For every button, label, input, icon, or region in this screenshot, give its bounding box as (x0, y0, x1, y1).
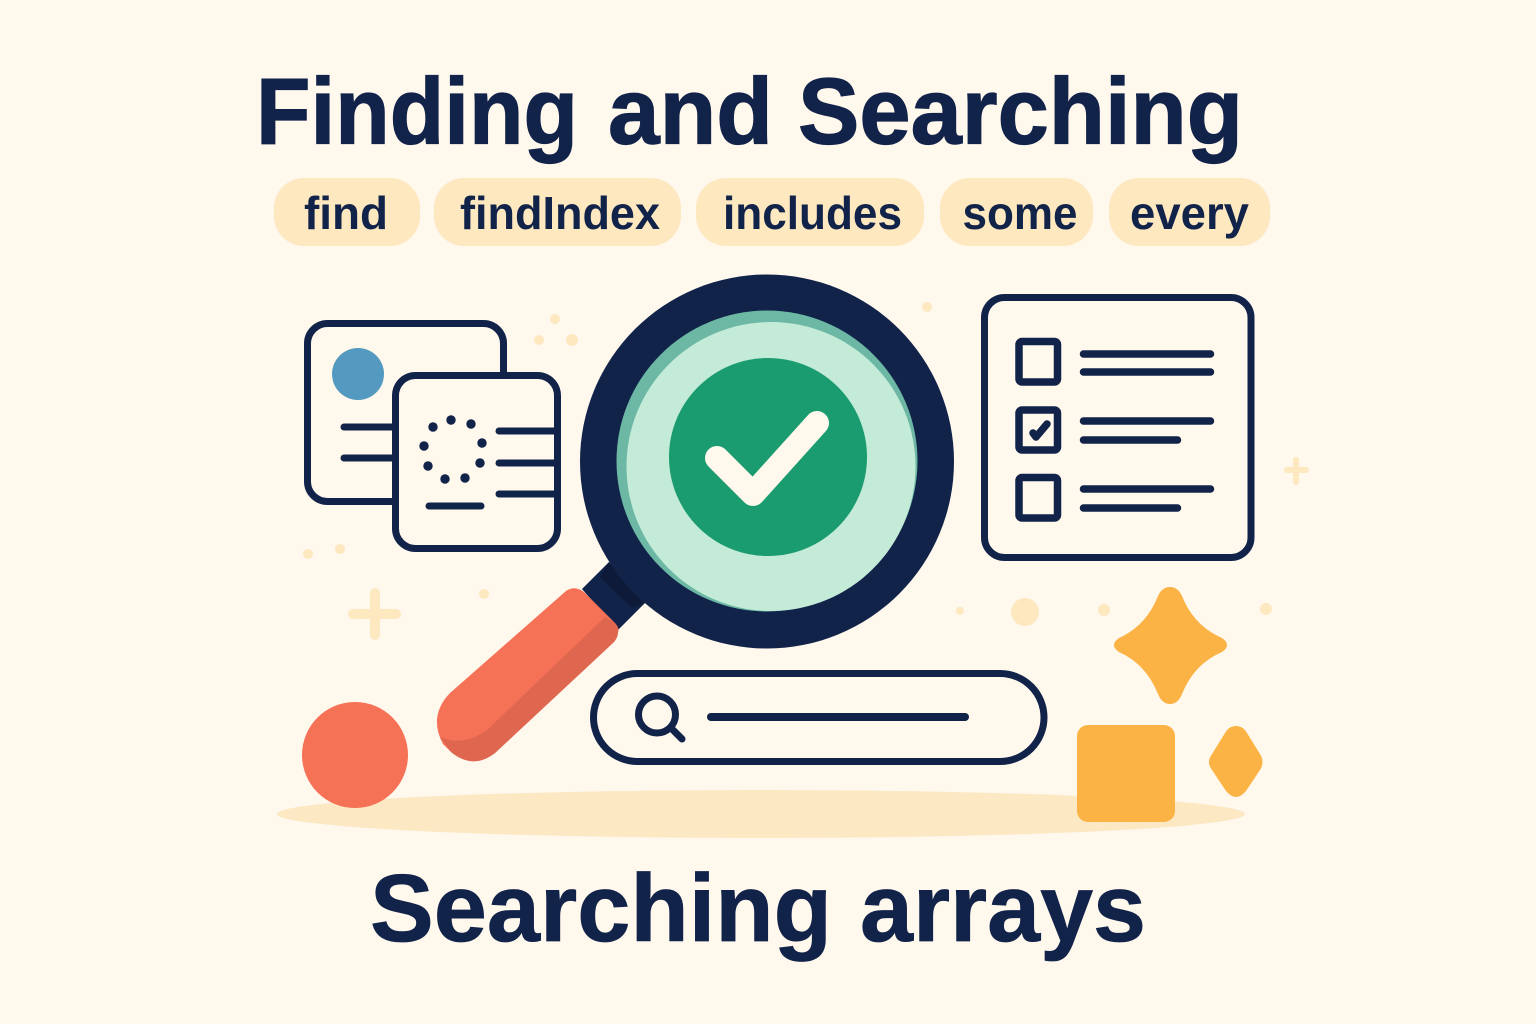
lens glass (616, 310, 918, 612)
title: and (608, 58, 773, 164)
subtitle: Searching (370, 855, 832, 962)
tag: every (1109, 178, 1270, 246)
yellow small diamond (1209, 726, 1262, 797)
tag: findIndex (434, 178, 681, 246)
front document (396, 376, 558, 548)
tag: every: every (1130, 187, 1249, 239)
document cards icon (308, 324, 558, 548)
checklist row 1 (1019, 342, 1210, 382)
tag: find: find (304, 187, 388, 239)
red handle (437, 588, 618, 761)
handle connector (582, 562, 645, 630)
search icon (638, 696, 682, 739)
tag: includes: includes (723, 187, 902, 239)
yellow large sparkle (1114, 587, 1227, 704)
checklist panel (984, 298, 1251, 558)
tag: find (274, 178, 420, 246)
ground shadow (277, 790, 1245, 838)
title: Searching (798, 58, 1243, 164)
red circle (302, 702, 408, 808)
tag: some (940, 178, 1093, 246)
check badge (669, 358, 867, 556)
lens ring (580, 274, 954, 648)
check mark (717, 423, 817, 494)
checklist row 2 (1019, 410, 1210, 450)
checklist row 3 (1019, 478, 1210, 518)
tag: some: some (962, 187, 1078, 239)
tag: findIndex: findIndex (460, 187, 660, 239)
search bar (594, 674, 1044, 762)
background sparkles and dots (303, 302, 1309, 640)
yellow square (1077, 725, 1175, 822)
back document (308, 324, 504, 502)
magnifying glass with check (437, 274, 954, 761)
method tags (274, 178, 1270, 246)
title: Finding (256, 58, 578, 164)
tag: includes (696, 178, 924, 246)
subtitle: arrays (860, 855, 1146, 962)
